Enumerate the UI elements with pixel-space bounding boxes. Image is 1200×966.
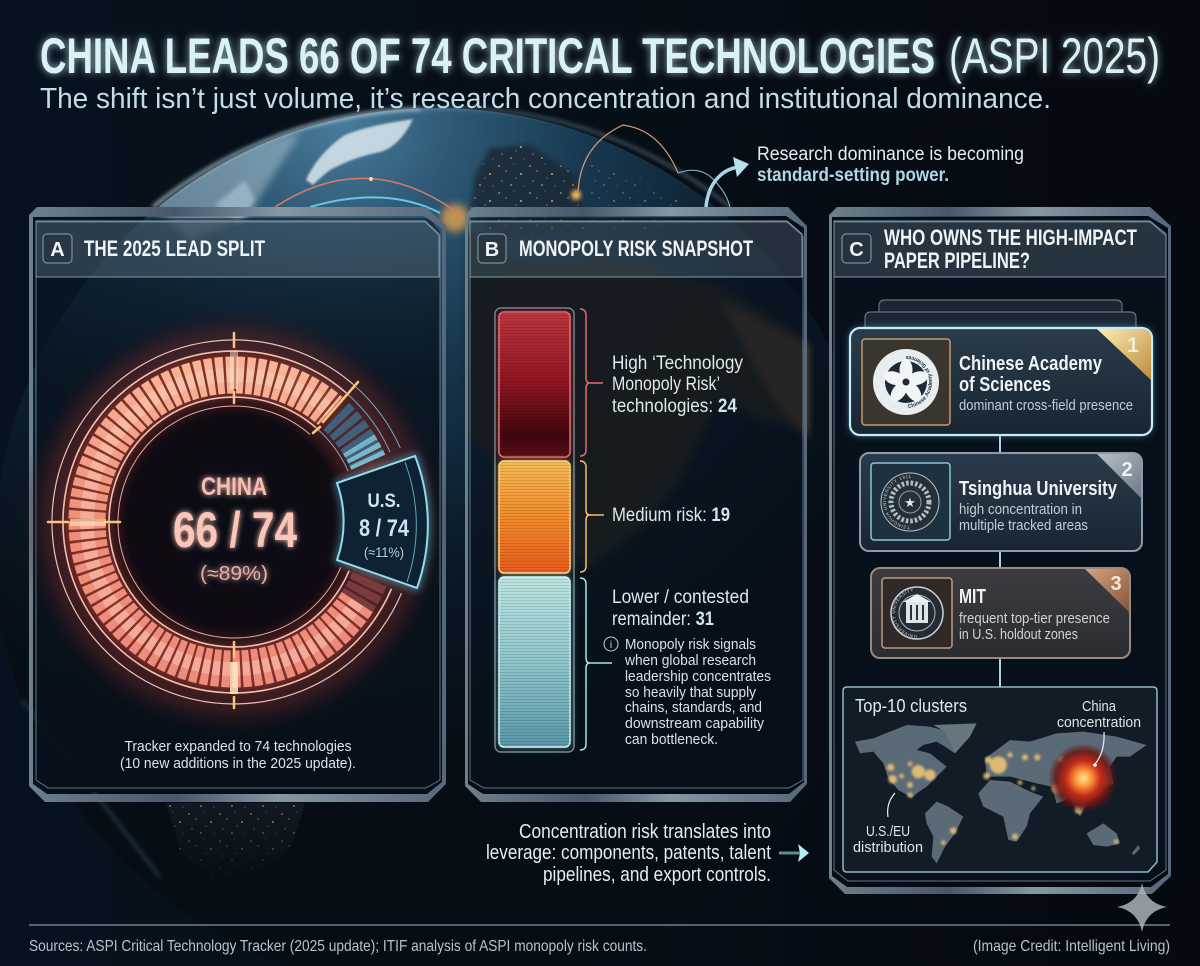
China label xyxy=(173,473,297,585)
annotation: China concentration: concentration xyxy=(1057,714,1141,731)
card: MIT: frequent top-tier presence xyxy=(959,610,1110,627)
icon: info xyxy=(604,637,618,651)
icon: info: i xyxy=(610,640,612,651)
label: lower risk: remainder: 31 xyxy=(612,608,714,630)
donut chart: lead split xyxy=(19,307,449,737)
segment: medium risk xyxy=(499,461,570,573)
panel: the 2025 lead split xyxy=(19,207,449,802)
logo: CAS: Chinese Academy of Sciences xyxy=(906,356,932,408)
callout: standard-setting power: Research dominance is becoming xyxy=(757,144,1024,165)
callout: concentration risk: Concentration risk translates into xyxy=(519,821,771,843)
label: high risk xyxy=(612,352,743,417)
label: lower risk: Lower / contested xyxy=(612,586,749,608)
annotation: China concentration xyxy=(1057,698,1141,767)
rank badge 1 xyxy=(1097,329,1151,380)
panel B header: MONOPOLY RISK SNAPSHOT xyxy=(519,236,753,261)
card: Chinese Academy of Sciences xyxy=(844,322,1158,440)
stacked risk bar xyxy=(495,308,574,752)
panel C header: PAPER PIPELINE? xyxy=(884,248,1030,273)
icon: sparkle xyxy=(1117,883,1167,932)
China segments xyxy=(87,375,357,669)
label: lower risk xyxy=(612,586,749,630)
rank badge 1: 1 xyxy=(1127,334,1139,357)
world map xyxy=(855,723,1147,863)
note: monopoly risk definition: can bottleneck. xyxy=(625,731,718,748)
logo: Tsinghua: TSINGHUA UNIVERSITY 1911 xyxy=(882,474,911,530)
logo: Tsinghua xyxy=(870,462,951,541)
label: high risk: Monopoly Risk’ xyxy=(612,373,720,395)
logo: Tsinghua: ★ xyxy=(904,495,916,510)
note: monopoly risk definition: so heavily that supply xyxy=(625,684,756,701)
U.S. callout: U.S. xyxy=(368,491,400,512)
U.S. segments xyxy=(336,416,368,462)
map panel: top-10 clusters xyxy=(843,687,1157,872)
label: high risk: technologies: 24 xyxy=(612,395,737,417)
brackets xyxy=(580,309,612,750)
callout: standard-setting power xyxy=(706,144,1024,207)
label: top-10 clusters: Top-10 clusters xyxy=(855,696,967,716)
panel: high-impact paper pipeline xyxy=(829,207,1171,894)
footer rule xyxy=(29,924,1170,926)
note: monopoly risk definition: leadership concentrates xyxy=(625,668,771,685)
logo: MIT: UNIVERSITY UNIVERSITY xyxy=(892,588,917,638)
label: medium risk: Medium risk: 19 xyxy=(612,504,730,526)
callout: concentration risk xyxy=(486,821,771,886)
logo: CAS xyxy=(861,338,951,426)
annotation: China concentration: China xyxy=(1082,698,1117,715)
card: Chinese Academy of Sciences: Chinese Academy xyxy=(959,353,1103,375)
tracker note xyxy=(120,738,356,772)
panel A header xyxy=(36,221,439,277)
China label: 66 / 74 xyxy=(173,502,297,558)
annotation: U.S./EU distribution: U.S./EU xyxy=(866,823,910,840)
label: high risk: High ‘Technology xyxy=(612,352,743,374)
callout: concentration risk: leverage: components, patents, talent xyxy=(486,842,771,864)
card: Chinese Academy of Sciences: dominant cross-field presence xyxy=(959,397,1133,414)
panel C header: C xyxy=(849,239,864,261)
stacked card edges xyxy=(865,300,1136,335)
rank badge 3: 3 xyxy=(1110,573,1122,595)
card: MIT: MIT xyxy=(959,586,986,608)
callout: standard-setting power: standard-setting power. xyxy=(757,165,949,186)
rank badge 2 xyxy=(1097,454,1141,498)
note: monopoly risk definition: Monopoly risk signals xyxy=(625,636,756,653)
note: monopoly risk definition xyxy=(624,636,771,748)
U.S. callout: 8 / 74 xyxy=(359,515,410,542)
sources: Sources: ASPI Critical Technology Tracker (2025 update); ITIF analysis of ASPI monopoly risk counts. xyxy=(29,938,647,955)
card: Chinese Academy of Sciences: of Sciences xyxy=(959,374,1051,396)
rank badge 2: 2 xyxy=(1121,459,1133,481)
panel B header xyxy=(470,221,802,277)
segment: lower risk xyxy=(499,577,570,747)
annotation: U.S./EU distribution: distribution xyxy=(853,839,923,856)
subtitle: The shift isn’t just volume, it’s research concentration and institutional dominance. xyxy=(40,83,1051,115)
card: MIT: in U.S. holdout zones xyxy=(959,626,1078,643)
globe network arcs xyxy=(275,125,730,217)
card: Tsinghua University: high concentration in xyxy=(959,501,1082,518)
China label: (≈89%) xyxy=(200,563,268,585)
globe backdrop xyxy=(9,104,834,877)
logo: MIT xyxy=(881,577,953,649)
note: monopoly risk definition: when global research xyxy=(624,652,756,669)
note: monopoly risk definition: chains, standards, and xyxy=(625,699,762,716)
card: Tsinghua University xyxy=(859,452,1143,552)
connector lines xyxy=(999,435,1001,687)
tracker note: (10 new additions in the 2025 update). xyxy=(120,755,356,772)
panel A header: THE 2025 LEAD SPLIT xyxy=(84,236,265,261)
tracker note: Tracker expanded to 74 technologies xyxy=(124,738,352,755)
panel B header: B xyxy=(485,239,499,261)
arrow: leverage xyxy=(779,844,809,862)
note: monopoly risk definition: downstream capability xyxy=(625,715,764,732)
panel: monopoly risk snapshot xyxy=(465,207,807,802)
panel A header: A xyxy=(50,239,65,261)
China label: CHINA xyxy=(201,473,267,501)
segment: high risk xyxy=(499,312,570,457)
image credit: (Image Credit: Intelligent Living) xyxy=(973,938,1170,955)
card: MIT xyxy=(870,567,1131,659)
card: Tsinghua University: multiple tracked areas xyxy=(959,517,1088,534)
annotation: U.S./EU distribution xyxy=(853,793,923,856)
cluster glows xyxy=(887,752,1118,845)
U.S. callout xyxy=(337,456,428,588)
callout: concentration risk: pipelines, and export controls. xyxy=(543,864,771,886)
card: Tsinghua University: Tsinghua University xyxy=(959,478,1118,500)
U.S. callout: (≈11%) xyxy=(364,544,404,560)
rank badge 3 xyxy=(1085,569,1129,612)
panel C header xyxy=(834,221,1166,277)
